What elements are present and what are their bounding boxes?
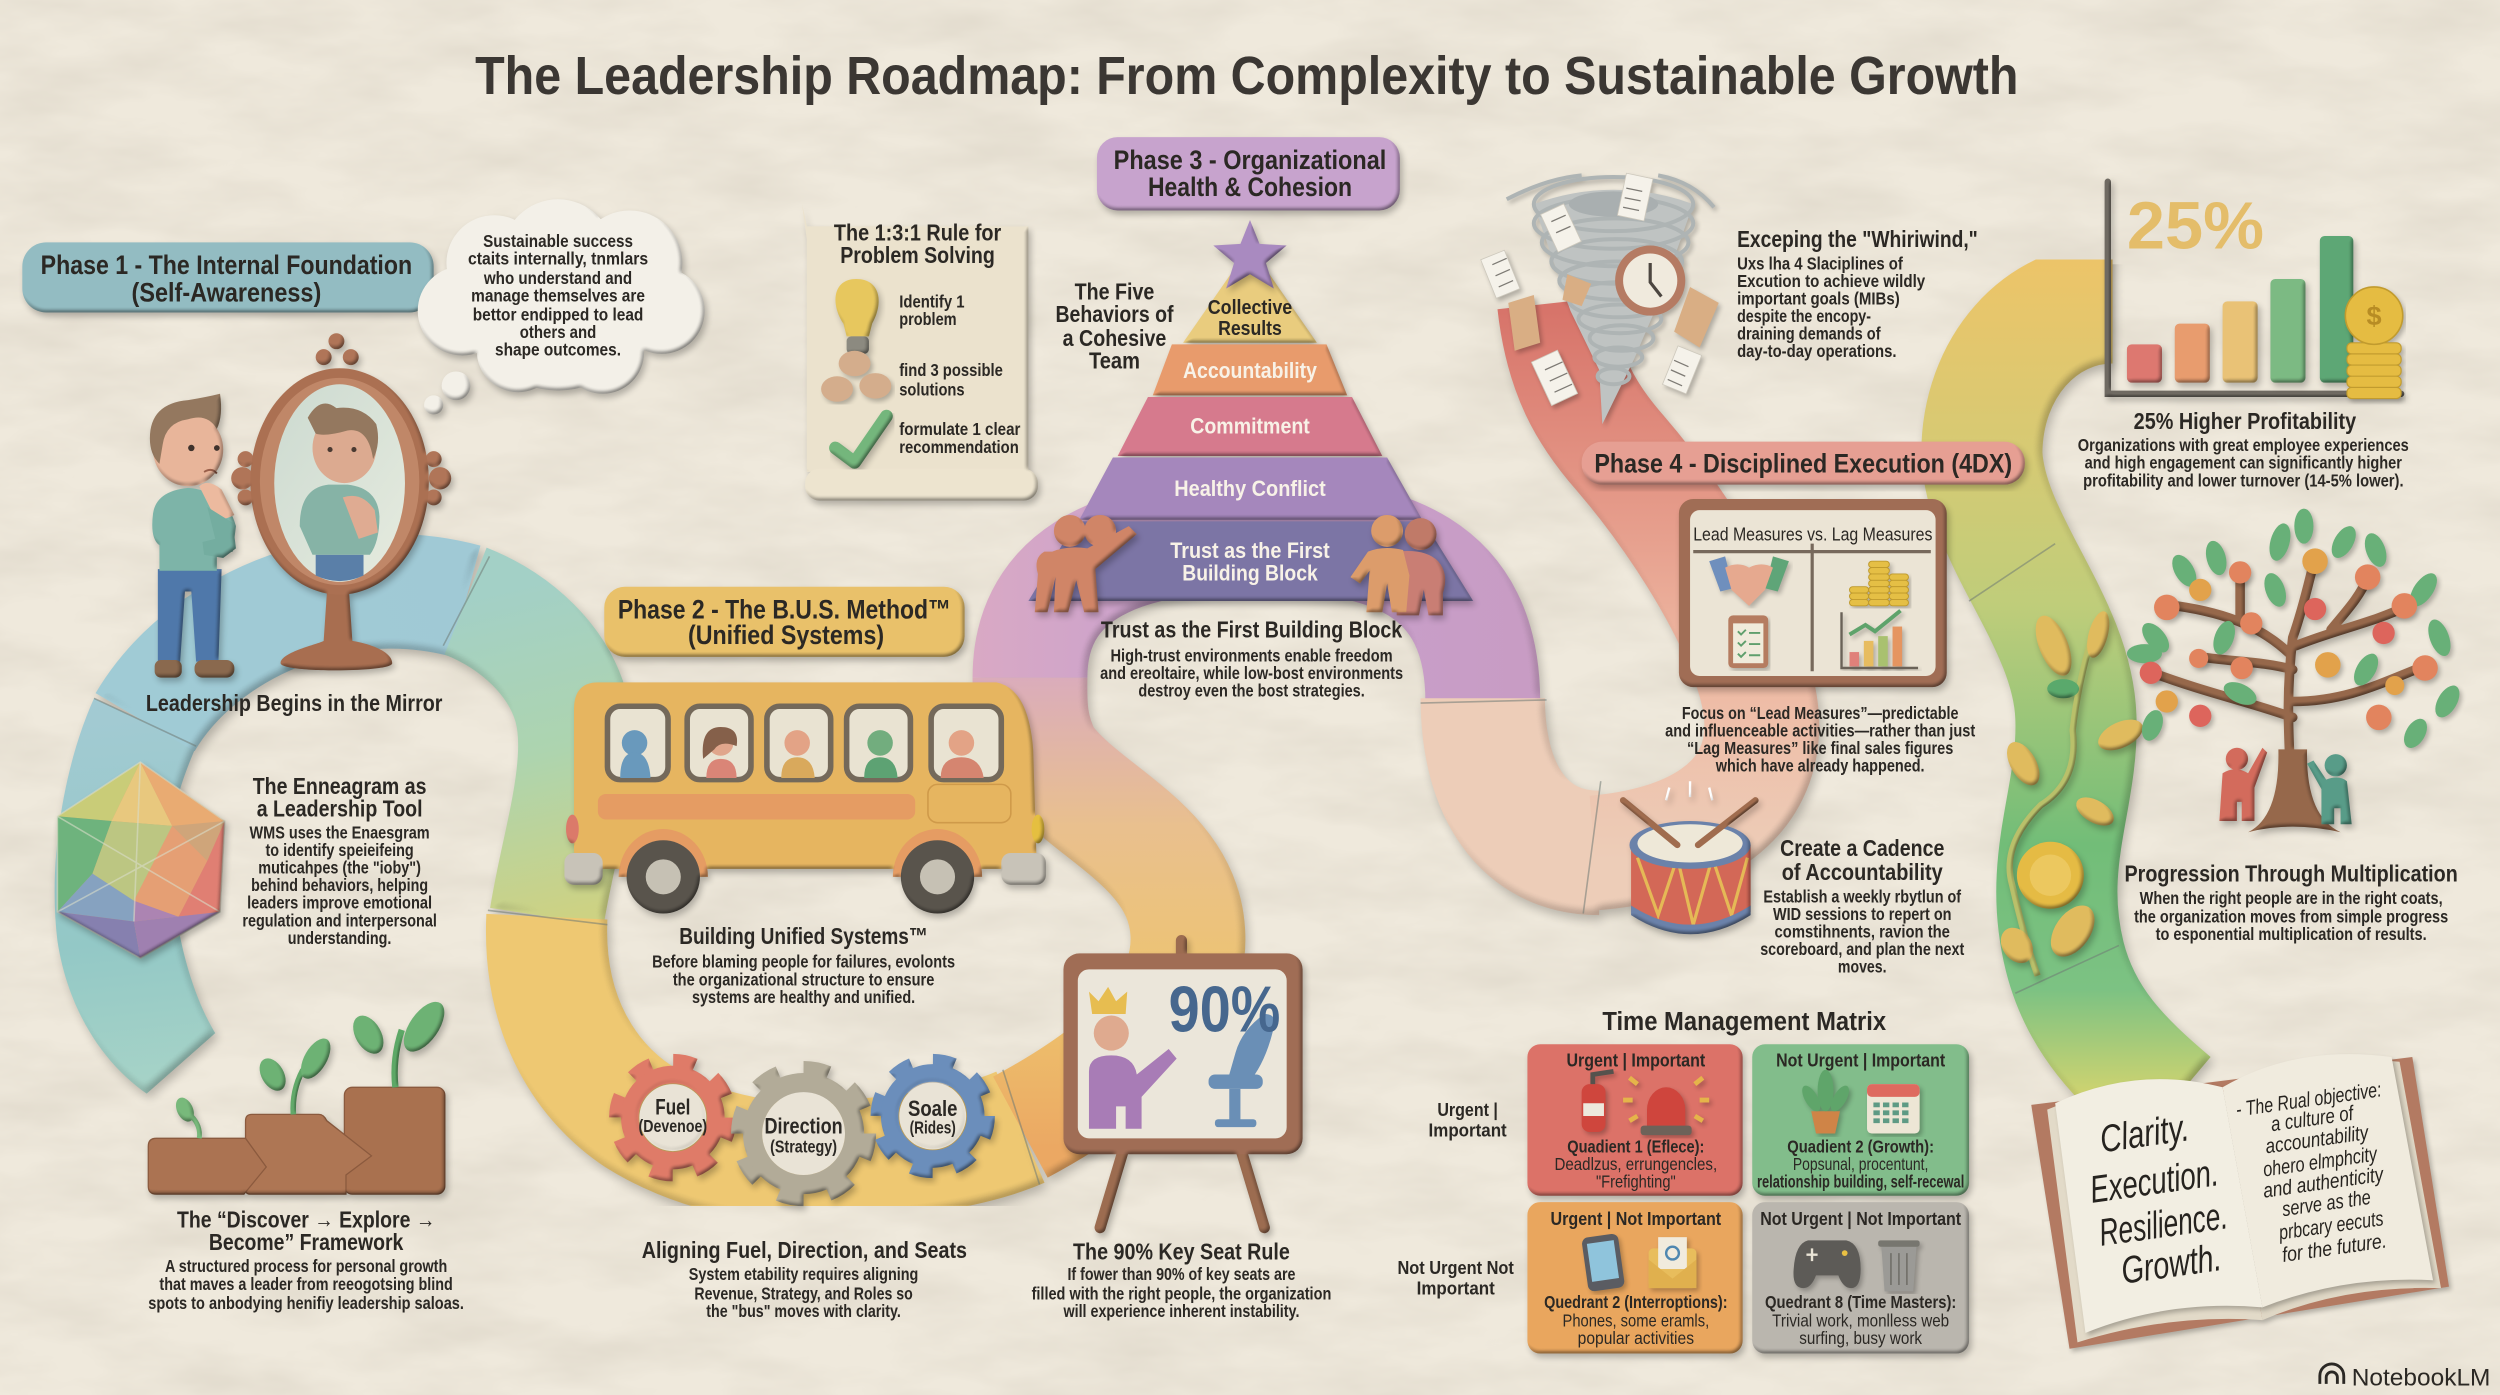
- thought cloud: Sustainable success: [483, 231, 633, 251]
- quadrant 4: Not Urgent | Not Important: [1760, 1208, 1961, 1229]
- mirror caption: Leadership Begins in the Mirror: [146, 690, 442, 716]
- gear: seats: (Rides): [910, 1118, 956, 1138]
- icon: enneagram gem: [57, 762, 225, 958]
- quadrant 4: Quedrant 8 (Time Masters):: [1765, 1292, 1956, 1312]
- 90 percent label: 90%: [1169, 973, 1280, 1046]
- icon: star: [1213, 220, 1287, 289]
- lead measures text: [1665, 703, 1975, 776]
- phase 2 pill: (Unified Systems): [688, 619, 884, 650]
- book left page text: Growth.: [2119, 1236, 2224, 1293]
- phase 1 pill: (Self-Awareness): [132, 276, 321, 307]
- gear: fuel: (Devenoe): [639, 1116, 707, 1136]
- layer: accountability: [1153, 344, 1347, 395]
- row labels: Important: [1417, 1278, 1495, 1299]
- enneagram text: leaders improve emotional: [247, 893, 432, 913]
- discover explore become text: The “Discover → Explore →: [177, 1207, 435, 1233]
- discover explore become text: Become” Framework: [209, 1229, 404, 1255]
- row labels: Urgent |: [1437, 1099, 1498, 1120]
- layer: collective results: Collective: [1208, 296, 1292, 319]
- book right page text: accountability: [2264, 1121, 2371, 1158]
- layer: collective results: [1183, 265, 1317, 343]
- bar chart: 25 percent profitability: $: [2367, 300, 2382, 331]
- cadence text: [1760, 835, 1965, 977]
- multiplication text: the organization moves from simple progress: [2134, 906, 2448, 926]
- quadrant 1: [1527, 1044, 1743, 1196]
- quadrant 1: Deadlzus, errungencles,: [1555, 1154, 1717, 1174]
- cadence text: comstihnents, ravion the: [1775, 921, 1950, 941]
- step two text: solutions: [899, 379, 965, 399]
- whirlwind text: despite the encopy-: [1737, 306, 1871, 326]
- panel: lead vs lag board: [1679, 499, 1947, 687]
- aligning text: [642, 1237, 967, 1321]
- book left page text: Resilience.: [2096, 1194, 2230, 1255]
- key seat rule text: [1032, 1238, 1331, 1321]
- step two text: [899, 360, 1003, 399]
- pyramid: [1028, 220, 1473, 601]
- icon: fruit tree with people: [2127, 509, 2464, 832]
- key seat rule text: If fower than 90% of key seats are: [1067, 1264, 1295, 1284]
- gear: seats: [879, 1062, 987, 1170]
- layer: healthy conflict: [1079, 458, 1422, 520]
- key seat rule text: filled with the right people, the organization: [1032, 1283, 1331, 1303]
- step one text: problem: [899, 309, 957, 329]
- book right page text: serve as the: [2281, 1186, 2372, 1221]
- step one text: [899, 292, 965, 329]
- thought cloud: others and: [520, 322, 596, 342]
- phase 1 pill: [22, 242, 434, 312]
- discover explore become text: spots to anbodying henifiy leadership saloas.: [148, 1293, 464, 1313]
- gear: direction: (Strategy): [770, 1137, 837, 1157]
- layer: healthy conflict: Healthy Conflict: [1174, 476, 1326, 501]
- book right page text: ohero elmphcity: [2262, 1143, 2380, 1181]
- multiplication text: to esponential multiplication of results.: [2156, 924, 2427, 944]
- enneagram text: regulation and interpersonal: [242, 910, 437, 930]
- row labels: Not Urgent Not: [1397, 1257, 1514, 1278]
- enneagram text: muticahpes (the "ioby"): [258, 858, 421, 878]
- panel: 1:3:1 rule scroll: [802, 204, 1038, 501]
- thought cloud: shape outcomes.: [495, 340, 621, 360]
- whirlwind text: draining demands of: [1737, 324, 1881, 344]
- bars: [2127, 236, 2353, 383]
- title: The Leadership Roadmap: From Complexity to Sustainable Growth: [475, 46, 2018, 106]
- layer: trust: Trust as the First: [1170, 538, 1330, 563]
- layer: commitment: [1118, 397, 1382, 456]
- trust text: and ereoltaire, while low-bost environments: [1100, 663, 1403, 683]
- five behaviors label: a Cohesive: [1063, 325, 1166, 351]
- icon: thinking man: [150, 394, 236, 678]
- trust text: [1100, 617, 1403, 701]
- enneagram text: [242, 773, 437, 948]
- five behaviors label: Behaviors of: [1055, 301, 1174, 327]
- lead measures text: Focus on “Lead Measures”—predictable: [1682, 703, 1958, 723]
- unified systems text: systems are healthy and unified.: [692, 987, 915, 1007]
- icon: mirror with reflection: [231, 333, 451, 670]
- phase 3 pill: [1097, 137, 1400, 210]
- profitability text: and high engagement can significantly higher: [2085, 453, 2402, 473]
- whirlwind text: day-to-day operations.: [1737, 341, 1897, 361]
- board heading: Lead Measures vs. Lag Measures: [1693, 523, 1932, 544]
- phase 4 pill: [1582, 442, 2025, 485]
- thought cloud: manage themselves are: [471, 285, 645, 305]
- whirlwind text: [1737, 226, 1978, 361]
- phase 1 pill: Phase 1 - The Internal Foundation: [41, 249, 412, 280]
- icon: tornado with clock: [1481, 173, 1719, 424]
- step three text: recommendation: [899, 437, 1019, 457]
- winding road path: [55, 303, 2172, 1163]
- quadrant 3: Phones, some eramls,: [1563, 1310, 1709, 1330]
- discover explore become text: that maves a leader from reeogotsing blind: [159, 1274, 453, 1294]
- five behaviors label: Team: [1089, 347, 1140, 373]
- thought cloud: bettor endipped to lead: [473, 304, 643, 324]
- row labels: Important: [1429, 1120, 1507, 1141]
- profitability text: 25% Higher Profitability: [2134, 408, 2356, 434]
- layer: commitment: Commitment: [1190, 414, 1310, 439]
- layer: collective results: Results: [1218, 317, 1282, 340]
- trust text: Trust as the First Building Block: [1101, 617, 1402, 643]
- book left page text: [2087, 1106, 2230, 1293]
- multiplication text: [2125, 861, 2458, 944]
- gear: fuel: Fuel: [655, 1094, 690, 1119]
- bar chart: 25 percent profitability: [2108, 182, 2403, 399]
- quadrant 2: Popsunal, procentunt,: [1793, 1154, 1928, 1174]
- whirlwind text: Exceping the "Whiriwind,": [1737, 226, 1978, 252]
- whirlwind text: Excution to achieve wildly: [1737, 271, 1926, 291]
- icon: sprouting steps: [148, 995, 452, 1194]
- quadrant 3: popular activities: [1578, 1328, 1694, 1348]
- book right page text: and authenticity: [2262, 1163, 2386, 1203]
- big percent: 25%: [2127, 189, 2264, 264]
- scroll heading: The 1:3:1 Rule for: [834, 220, 1001, 246]
- whirlwind text: important goals (MIBs): [1737, 289, 1900, 309]
- enneagram text: WMS uses the Enaesgram: [250, 823, 430, 843]
- book right page text: prbcary eecuts: [2277, 1207, 2385, 1245]
- unified systems text: [652, 923, 955, 1007]
- axes: [2108, 182, 2401, 394]
- gear: fuel: [617, 1062, 729, 1173]
- phase 2 pill: [604, 587, 965, 657]
- enneagram text: The Enneagram as: [253, 773, 426, 799]
- gear: direction: Direction: [765, 1114, 843, 1139]
- five behaviors label: The Five: [1075, 279, 1154, 305]
- icon: coin stacks: [1849, 561, 1908, 606]
- quadrant 3: [1527, 1202, 1743, 1354]
- cadence text: moves.: [1838, 957, 1887, 977]
- quadrant 4: Trivial work, monlless web: [1772, 1310, 1949, 1330]
- fruit and leaves: [2127, 509, 2464, 752]
- lead measures text: which have already happened.: [1715, 756, 1925, 776]
- cadence text: Establish a weekly rbytlun of: [1763, 886, 1961, 906]
- icon: embracing figures right: [1350, 515, 1445, 615]
- aligning text: System etability requires aligning: [689, 1264, 918, 1284]
- thought cloud: [418, 199, 705, 415]
- whirlwind text: Uxs lha 4 Slaciplines of: [1737, 253, 1903, 273]
- quadrant 1: "Frefighting": [1596, 1172, 1676, 1192]
- icon: three gears: [617, 1062, 987, 1197]
- phase 3 pill: Health & Cohesion: [1148, 171, 1352, 202]
- unified systems text: Before blaming people for failures, evolonts: [652, 952, 955, 972]
- icon: vine with coin: [1994, 609, 2148, 976]
- icon: light bulb: [836, 279, 879, 354]
- thought cloud: ctaits internally, tnmlars: [468, 249, 648, 269]
- lead measures text: “Lag Measures” like final sales figures: [1687, 738, 1953, 758]
- quadrant 2: Quadient 2 (Growth):: [1787, 1137, 1934, 1157]
- matrix heading: Time Management Matrix: [1602, 1006, 1886, 1036]
- step three text: formulate 1 clear: [899, 419, 1021, 439]
- step one text: Identify 1: [899, 292, 965, 312]
- scroll heading: [834, 220, 1001, 268]
- quadrant 4: surfing, busy work: [1799, 1328, 1922, 1348]
- book left page text: Clarity.: [2097, 1106, 2192, 1161]
- quadrant 1: Urgent | Important: [1566, 1050, 1705, 1071]
- icon: 90% easel board: [1063, 941, 1303, 1228]
- panel: time management matrix: [1397, 1006, 1969, 1354]
- gear: direction: [740, 1070, 867, 1197]
- five behaviors label: [1055, 279, 1174, 373]
- people under tree: [2219, 748, 2352, 824]
- phase 2 pill: Phase 2 - The B.U.S. Method™: [618, 594, 951, 625]
- profitability text: [2078, 408, 2409, 490]
- icon: drum: [1623, 781, 1755, 934]
- trust text: destroy even the bost strategies.: [1138, 681, 1365, 701]
- book right page text: for the future.: [2281, 1229, 2388, 1267]
- quadrant 4: [1752, 1202, 1969, 1354]
- icon: school bus: [564, 682, 1046, 914]
- cadence text: WID sessions to repert on: [1773, 904, 1952, 924]
- NotebookLM logo: NotebookLM: [2352, 1364, 2490, 1391]
- book right page text: - The Rual objective:: [2234, 1078, 2383, 1122]
- trust text: High-trust environments enable freedom: [1110, 646, 1393, 666]
- aligning text: Aligning Fuel, Direction, and Seats: [642, 1237, 967, 1263]
- step two text: find 3 possible: [899, 360, 1003, 380]
- icon: coins: [2345, 287, 2403, 399]
- lead measures text: and influenceable activities—rather than just: [1665, 721, 1975, 741]
- icon: rising chart: [1842, 611, 1918, 668]
- cadence text: of Accountability: [1782, 859, 1943, 885]
- aligning text: the "bus" moves with clarity.: [706, 1301, 901, 1321]
- phase 3 pill: Phase 3 - Organizational: [1114, 144, 1386, 175]
- step three text: [899, 419, 1021, 457]
- quadrant 2: relationship building, self-recewal: [1757, 1172, 1964, 1192]
- row labels: [1397, 1099, 1514, 1299]
- quadrant 3: Urgent | Not Important: [1551, 1208, 1721, 1229]
- enneagram text: to identify speieifeing: [265, 840, 414, 860]
- quadrant 3: Quedrant 2 (Interroptions):: [1544, 1292, 1728, 1312]
- profitability text: profitability and lower turnover (14-5% lower).: [2083, 470, 2404, 490]
- unified systems text: the organizational structure to ensure: [673, 969, 934, 989]
- layer: accountability: Accountability: [1183, 358, 1317, 383]
- key seat rule text: The 90% Key Seat Rule: [1073, 1238, 1290, 1264]
- profitability text: Organizations with great employee experiences: [2078, 435, 2409, 455]
- thought cloud: who understand and: [483, 268, 632, 288]
- phase 4 pill: Phase 4 - Disciplined Execution (4DX): [1594, 448, 2012, 479]
- layer: trust: Building Block: [1182, 560, 1318, 585]
- icon: idea bubbles: [821, 351, 891, 402]
- discover explore become text: A structured process for personal growth: [165, 1256, 447, 1276]
- enneagram text: a Leadership Tool: [257, 795, 423, 821]
- multiplication text: When the right people are in the right coats,: [2140, 888, 2443, 908]
- cadence text: Create a Cadence: [1780, 835, 1944, 861]
- gear: seats: Soale: [908, 1096, 957, 1121]
- aligning text: Revenue, Strategy, and Roles so: [694, 1283, 913, 1303]
- book right page text: a culture of: [2269, 1102, 2357, 1136]
- enneagram text: behind behaviors, helping: [251, 875, 428, 895]
- book right page text: [2234, 1078, 2388, 1267]
- icon: clipboard: [1728, 615, 1768, 668]
- icon: handshake: [1709, 556, 1789, 606]
- quadrant 2: [1752, 1044, 1969, 1196]
- layer: trust: [1028, 521, 1473, 601]
- scroll heading: Problem Solving: [840, 242, 995, 268]
- icon: check mark: [835, 416, 886, 462]
- icon: open book: [2031, 1054, 2449, 1349]
- enneagram text: understanding.: [288, 928, 391, 948]
- quadrant 1: Quadient 1 (Eflece):: [1567, 1137, 1704, 1157]
- key seat rule text: will experience inherent instability.: [1063, 1301, 1299, 1321]
- icon: embracing figures left: [1035, 515, 1137, 612]
- book left page text: Execution.: [2087, 1151, 2221, 1212]
- quadrant 2: Not Urgent | Important: [1776, 1050, 1945, 1071]
- discover explore become text: [148, 1207, 464, 1313]
- unified systems text: Building Unified Systems™: [679, 923, 928, 949]
- cadence text: scoreboard, and plan the next: [1760, 939, 1965, 959]
